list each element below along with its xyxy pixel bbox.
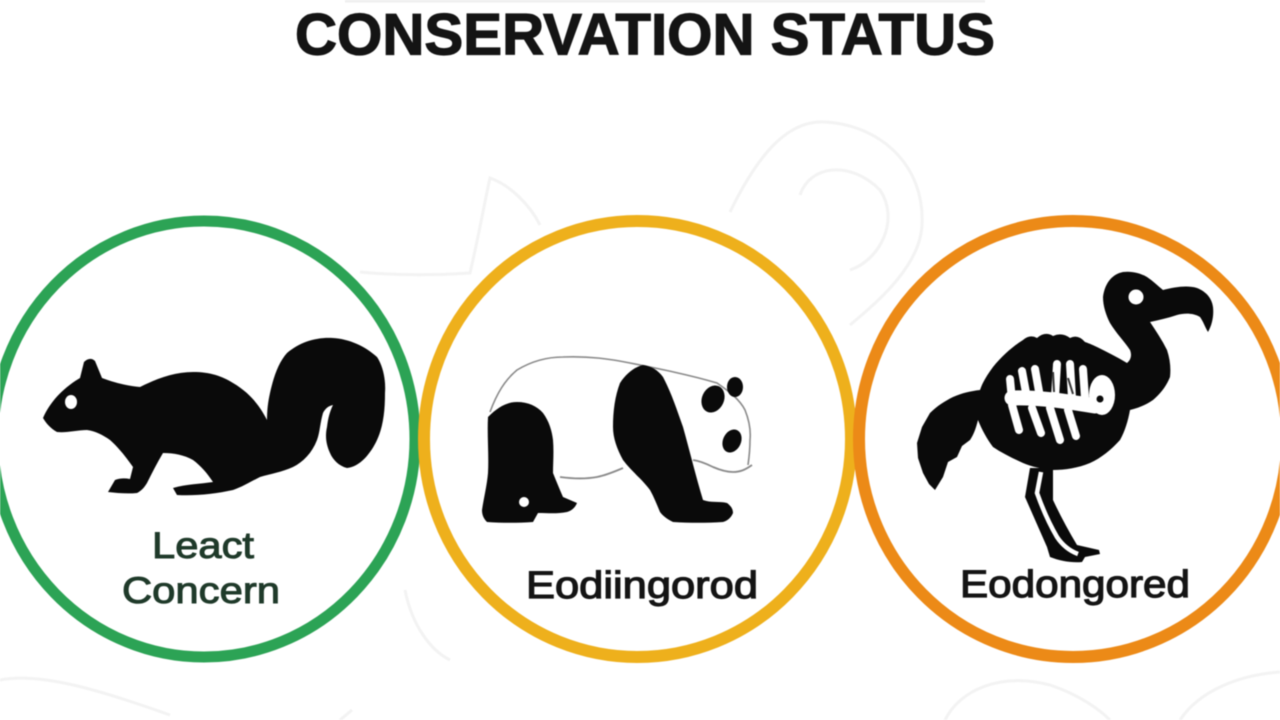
dodo eye: [1128, 290, 1144, 304]
label: endangered: Eodiingorod: [526, 565, 758, 607]
label: least concern: [122, 525, 280, 611]
panel: endangered panda: [424, 221, 851, 657]
title: CONSERVATION STATUS: [295, 2, 995, 68]
dodo ribs: [1010, 364, 1095, 440]
icon: squirrel: [43, 338, 385, 495]
panel: extinct dodo: [859, 221, 1280, 657]
label: extinct: Eodongored: [960, 564, 1190, 606]
icon: panda: [482, 357, 752, 523]
yellow status ring: [424, 221, 851, 657]
icon: dodo skeleton: [917, 272, 1213, 562]
panel: least concern: [0, 221, 415, 657]
orange status ring: [859, 221, 1280, 657]
label: least concern: Leact: [152, 525, 255, 566]
dodo legs: [1025, 468, 1100, 562]
green status ring: [0, 221, 415, 657]
label: least concern: Concern: [122, 570, 280, 611]
